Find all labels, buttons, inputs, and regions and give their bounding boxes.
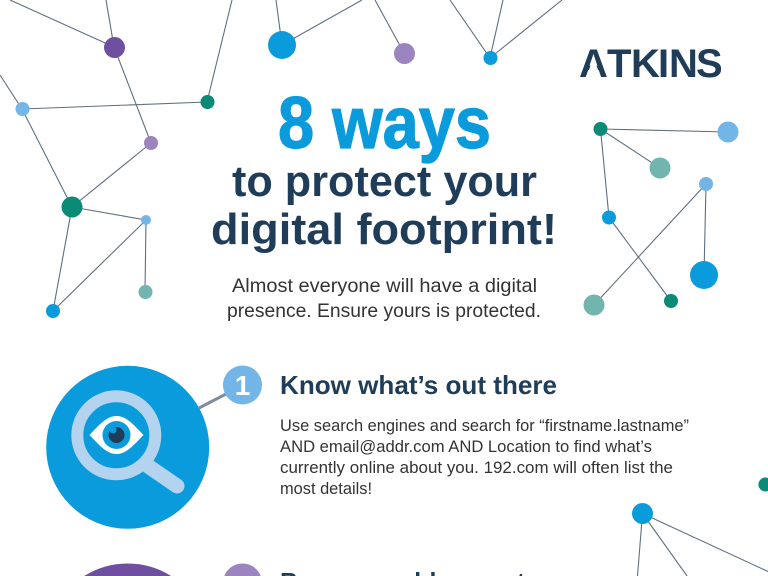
badge: number 2 (224, 564, 261, 576)
title: 8 ways (278, 83, 491, 164)
title: to protect your (232, 157, 537, 206)
network: right (584, 122, 738, 316)
step 1 text: most details! (280, 480, 372, 498)
step 1 heading: Know what’s out there (280, 370, 557, 400)
intro text: presence. Ensure yours is protected. (227, 300, 541, 322)
title (211, 83, 557, 254)
step 1 text (280, 417, 689, 498)
network: bottom right (632, 478, 768, 576)
network: top centre (268, 0, 562, 65)
intro text: Almost everyone will have a digital (232, 275, 537, 297)
badge: number 1 (223, 366, 262, 404)
icon: step 2 circle (84, 563, 171, 576)
connector: step 1 (199, 393, 228, 408)
icon: magnifying glass with eye (46, 366, 209, 529)
logo: Atkins: ATKINS (579, 42, 723, 86)
step 1 text: currently online about you. 192.com will often list the (280, 459, 673, 477)
step 1 text: Use search engines and search for “firstname.lastname” (280, 417, 689, 435)
step 1 text: AND email@addr.com AND Location to find what’s (280, 438, 652, 456)
intro text (227, 275, 541, 322)
title: digital footprint! (211, 205, 557, 254)
network: top left (0, 0, 232, 318)
badge: number 1: 1 (235, 370, 250, 401)
